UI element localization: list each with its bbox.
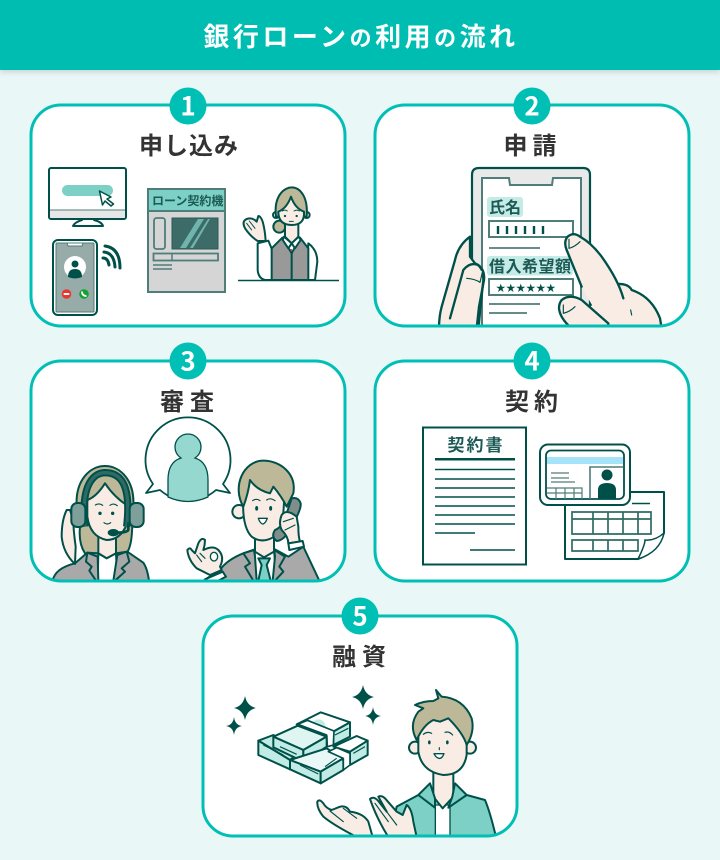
form field: amount: ★★★★★★ (496, 284, 556, 294)
step number 5: 5 (352, 596, 368, 634)
heading: 契約: 契約 (505, 389, 563, 416)
step number 2: 2 (524, 86, 540, 124)
panel: step 2 申請 (375, 86, 689, 330)
illustration: form sheet with curled corner (565, 492, 664, 559)
illustration: man on telephone with OK gesture (187, 461, 319, 583)
illustration: happy man presenting (317, 690, 496, 837)
panel: step 1 申し込み (31, 86, 345, 326)
step number 4 (514, 342, 550, 380)
step number 5 (342, 596, 378, 634)
illustration: hands holding smartphone form (439, 168, 662, 330)
panel: step 4 契約 (375, 342, 689, 581)
icon: loan contract machine: ローン契約機 (152, 193, 223, 208)
illustration: bank clerk woman (244, 187, 317, 280)
icon: desktop monitor with cursor (49, 168, 126, 226)
heading: 申し込み: 申し込み (139, 133, 239, 160)
step number 3 (170, 342, 206, 380)
step number 3: 3 (180, 342, 196, 378)
title banner: 銀行ローンの利用の流れ (203, 22, 519, 52)
hands (439, 234, 662, 328)
illustration: contract document (423, 428, 526, 564)
icon: ID card (540, 444, 630, 505)
icon: loan contract machine (148, 189, 225, 292)
icon: smartphone call (53, 240, 97, 315)
form label: 借入希望額: 借入希望額 (489, 257, 572, 276)
step number 1 (170, 86, 206, 124)
title banner (0, 0, 720, 70)
heading: 申請: 申請 (504, 133, 562, 160)
form field: amount (489, 279, 573, 295)
illustration: woman operator with headset (53, 466, 149, 581)
form label: 氏名: 氏名 (489, 199, 521, 217)
heading: 融資: 融資 (332, 644, 392, 671)
step number 1: 1 (180, 86, 196, 124)
panel: step 3 審査 (31, 342, 345, 583)
form field: name (489, 221, 573, 237)
right hand (559, 234, 662, 328)
step number 4: 4 (524, 342, 540, 378)
icon: stacks of banknotes (258, 712, 368, 783)
left hand (439, 237, 484, 328)
heading: 審査: 審査 (160, 389, 220, 416)
icon: sparkles (226, 685, 381, 735)
speech bubble with customer silhouette (146, 417, 230, 502)
step number 2 (514, 86, 550, 124)
panel: step 5 融資 (203, 596, 517, 837)
icon: signal waves (103, 246, 120, 268)
illustration: contract document: 契約書 (448, 435, 504, 455)
desk line (238, 280, 339, 282)
